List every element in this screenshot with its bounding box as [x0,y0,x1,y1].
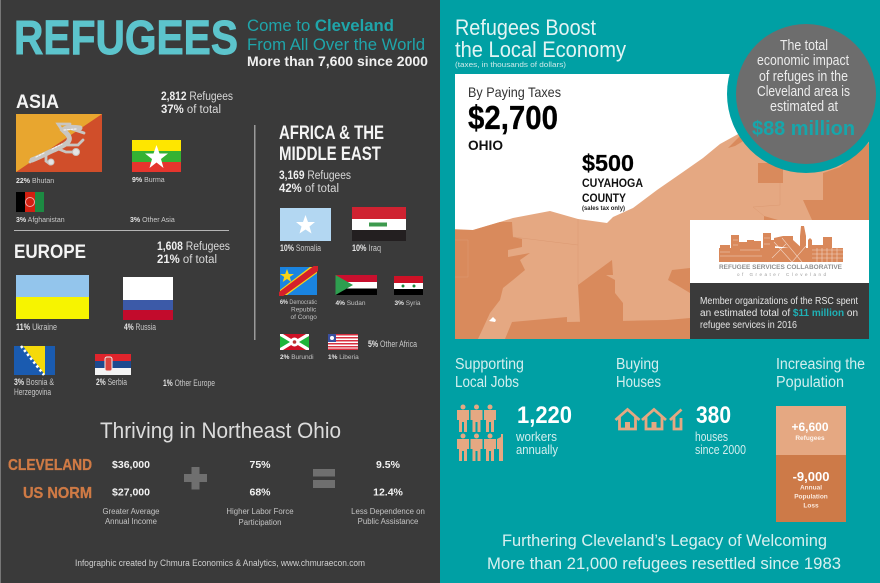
callout: RSC spending: an estimated total of $11 million on [700,308,858,319]
stat: workers [515,402,572,457]
tax text: Cuyahoga County: $500 [582,150,634,176]
labels: Africa and Middle East countries: 6% Democratic [280,299,318,306]
labels: Asia countries: 22% Bhutan [16,178,54,185]
heading: Europe: EUROPE [14,242,86,263]
callout circle: economic impact: economic impact [757,53,849,69]
icon: plus [184,467,207,490]
tax text: Ohio: OHIO [468,137,503,153]
labels: Asia countries: 3% Afghanistan [16,217,65,224]
labels: Asia countries [16,177,175,224]
icon: equals [313,469,335,488]
tax text: Cuyahoga County: (sales tax only) [582,206,625,212]
callout circle: economic impact: $88 million [752,118,855,140]
stat: Africa refugees: 3,169 Refugees [279,170,351,182]
stat: Asia refugees: 37% of total [161,104,221,116]
heading: Refugees Boost the Local Economy [455,15,626,69]
footer: legacy of welcoming [487,531,841,573]
flag: Serbia [95,354,131,375]
labels: Africa and Middle East countries: 4% Sudan [336,300,366,307]
stat: workers: workers [515,430,557,444]
callout circle: economic impact: of refuges in the [759,69,848,85]
column: public assistance: Public Assistance [358,517,418,526]
column: public assistance: Less Dependence on [351,507,425,516]
section: Thriving in Northeast Ohio [8,418,425,527]
callout circle: economic impact: Cleveland area is [757,84,850,100]
heading: houses: Buying [616,356,659,373]
logo: Refugee Services Collaborative: REFUGEE SERVICES COLLABORATIVE [719,264,843,271]
panel: left dark background [0,0,440,583]
heading: Refugees Boost the Local Economy: (taxes, in thousands of dollars) [455,60,567,69]
section: Supporting Local Jobs [455,356,572,461]
labels: Africa and Middle East countries: 2% Burundi [280,354,314,361]
column: income: $36,000 [112,459,150,471]
callout circle: economic impact [727,15,880,173]
stat: workers: annually [516,443,559,457]
column: labor force: 75% [249,459,271,471]
section: Asia [16,91,233,224]
section: Africa and the Middle East [279,123,423,361]
heading: houses [616,356,661,391]
stat: Europe refugees: 21% of total [157,254,217,266]
panel: right teal background [440,0,880,583]
heading: Africa and the Middle East [279,123,384,165]
labels: Africa and Middle East countries: Republic [291,306,317,314]
flag: Russia [123,277,173,320]
labels: Europe countries: 3% Bosnia & [14,377,54,387]
labels: Africa and Middle East countries: 10% Iraq [352,243,381,253]
labels: Africa and Middle East countries: 5% Other Africa [368,339,417,349]
callout circle: economic impact: estimated at [770,99,838,115]
row labels: CLEVELAND [8,457,92,474]
heading: jobs: Supporting [455,356,524,373]
subtitle block: More than 7,600 since 2000 [247,53,428,69]
column: income [102,459,160,526]
row labels: US NORM [23,485,92,502]
column: income: $27,000 [112,486,150,498]
subtitle block: Come to Cleveland [247,16,394,35]
column: income: Annual Income [105,517,157,526]
callout circle: economic impact: The total [780,38,828,54]
logo: Refugee Services Collaborative: of Greater Cleveland [737,272,826,277]
footer: legacy of welcoming: More than 21,000 refugees resettled since 1983 [487,554,841,573]
tax text: Ohio [468,84,561,153]
credit line: Infographic created by Chmura Economics & Analytics, www.chmuraecon.com [75,558,365,568]
section: Buying Houses [616,356,746,457]
labels: Africa and Middle East countries: 3% Syria [394,300,421,307]
flag: Iraq [352,207,406,241]
stat: houses [695,402,746,457]
stat: houses: 380 [696,402,731,429]
heading: population: Increasing the [776,356,865,373]
flag: Bhutan [16,114,102,172]
flag: Burundi [280,334,309,350]
heading: Thriving: Thriving in Northeast Ohio [100,418,341,443]
heading: jobs: Local Jobs [455,374,519,391]
tax text: Cuyahoga County: CUYAHOGA [582,176,643,190]
labels: Europe countries: 11% Ukraine [16,322,57,332]
section: Europe [14,241,230,397]
stat: houses: since 2000 [695,443,746,457]
title: REFUGEES: REFUGEES [14,12,238,65]
labels: Africa and Middle East countries: of Congo [290,314,317,321]
heading: population: Population [776,374,844,391]
flag: Liberia [328,334,358,350]
flag: Bosnia and Herzegovina [14,346,55,375]
flag: Sudan [336,275,377,295]
tax text: Ohio: $2,700 [468,99,558,136]
labels: Europe countries: 1% Other Europe [163,378,215,388]
callout: RSC spending: refugee services in 2016 [700,320,797,331]
block: refugees gain: +6,600 [791,420,829,434]
labels: Europe countries: 2% Serbia [96,377,127,387]
footer: legacy of welcoming: Furthering Cleveland’s Legacy of Welcoming [502,531,827,550]
labels: Asia countries: 3% Other Asia [130,217,175,224]
column: public assistance: 12.4% [373,486,404,498]
section: Increasing the Population [776,356,865,522]
heading: Africa and the Middle East: AFRICA & THE [279,123,384,144]
labels: Europe countries: 4% Russia [124,322,156,332]
tax text: Cuyahoga County: COUNTY [582,191,626,205]
subtitle block: From All Over the World [247,35,425,54]
row labels [8,457,92,502]
heading: population [776,356,865,391]
flag: Somalia [280,208,331,241]
labels: Europe countries [14,322,215,397]
stat: Europe refugees: 1,608 Refugees [157,241,230,253]
stat: workers: 1,220 [517,402,572,429]
block: population loss [776,455,846,522]
block: refugees gain: Refugees [795,435,825,442]
column: income: Greater Average [102,507,160,516]
stat: Asia refugees: 2,812 Refugees [161,91,233,103]
stat: Africa refugees: 42% of total [279,183,339,195]
column: public assistance [351,459,425,526]
column: labor force: Higher Labor Force [226,507,294,516]
map: Ohio counties [455,125,869,339]
block: population loss: Population [794,494,828,500]
heading: Africa and the Middle East: MIDDLE EAST [279,144,381,165]
flag: Burma [132,140,181,172]
heading: Refugees Boost the Local Economy: the Local Economy [455,37,626,62]
callout: RSC spending: Member organizations of the RSC spent [700,296,858,307]
labels: Asia countries: 9% Burma [132,177,165,184]
labels: Africa and Middle East countries [280,243,421,361]
flag: Ukraine [16,275,89,319]
icon: skyline [719,226,843,262]
icon: workers [457,404,503,461]
map panel [455,74,869,339]
column: labor force: Participation [239,518,281,527]
flag: Syria [394,276,423,295]
icon: houses [616,410,682,429]
flag: DR Congo [280,267,317,295]
labels: Africa and Middle East countries: 1% Liberia [328,354,359,361]
tax text: Ohio: By Paying Taxes [468,84,561,100]
block: population loss: -9,000 [793,469,829,484]
heading: jobs [455,356,524,391]
labels: Africa and Middle East countries: 10% Somalia [280,243,321,253]
column: labor force: 68% [249,486,271,498]
column: labor force [226,459,294,527]
stat: Europe refugees [157,241,230,266]
flag: Afghanistan [16,192,44,212]
stat: Asia refugees [161,91,233,116]
tax text: Cuyahoga County [582,150,643,212]
block: population loss: Loss [803,502,819,510]
block: refugees gain [776,406,846,455]
column: public assistance: 9.5% [376,459,401,471]
block: population loss: Annual [800,484,822,492]
subtitle block [247,16,428,69]
stat: Africa refugees [279,170,351,195]
callout: RSC spending [690,283,869,339]
heading: Asia: ASIA [16,92,59,113]
logo: Refugee Services Collaborative [690,220,869,283]
stat: houses: houses [695,430,728,444]
heading: houses: Houses [616,374,661,391]
labels: Europe countries: Herzegovina [14,387,51,397]
heading: Refugees Boost the Local Economy: Refugees Boost [455,15,596,40]
